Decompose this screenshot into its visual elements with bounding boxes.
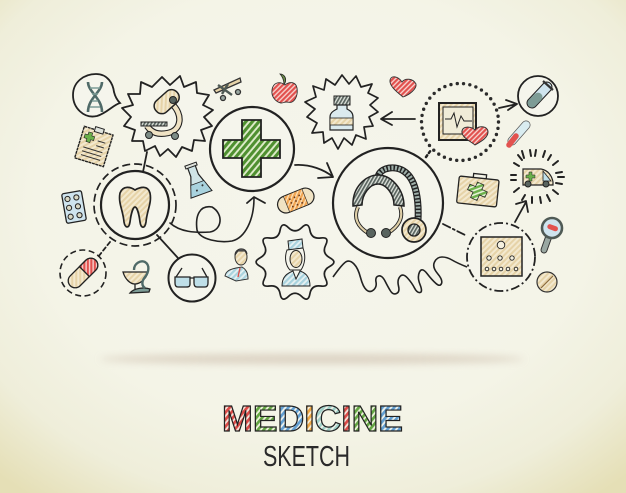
circle: green cross [210,107,294,191]
circle: tooth [94,164,176,246]
circle: eye chart [467,223,535,291]
squiggle [333,257,467,294]
icon: heart [390,77,416,97]
drop shadow [100,354,524,364]
icon: first aid kit [457,172,500,207]
circle: glasses [168,254,216,302]
icon: thermometer [509,125,526,145]
icon: apple [272,74,297,103]
icon: tablet [537,272,557,292]
icon: nurse gear [256,225,334,299]
icon: doctor [225,249,248,281]
circle: test tube [518,76,558,116]
icon: microscope star [122,76,213,157]
connector lines [98,100,528,258]
icon: pill blister [62,190,86,224]
circle: stethoscope [333,148,443,258]
title: MEDICINE [222,398,403,439]
icon: flask [180,160,212,198]
icon: DNA bubble [73,74,120,116]
circle: monitor [422,84,498,160]
icon: clipboard [75,123,114,167]
icon: vial star [305,75,378,149]
icon: ambulance [511,150,564,203]
subtitle: SKETCH [263,441,350,473]
icon: bandage [275,186,317,216]
icon: bowl of hygieia [123,261,150,293]
icon: magnifier [542,218,562,250]
circle: capsule [60,250,106,296]
icon: scissors tool [214,78,241,100]
